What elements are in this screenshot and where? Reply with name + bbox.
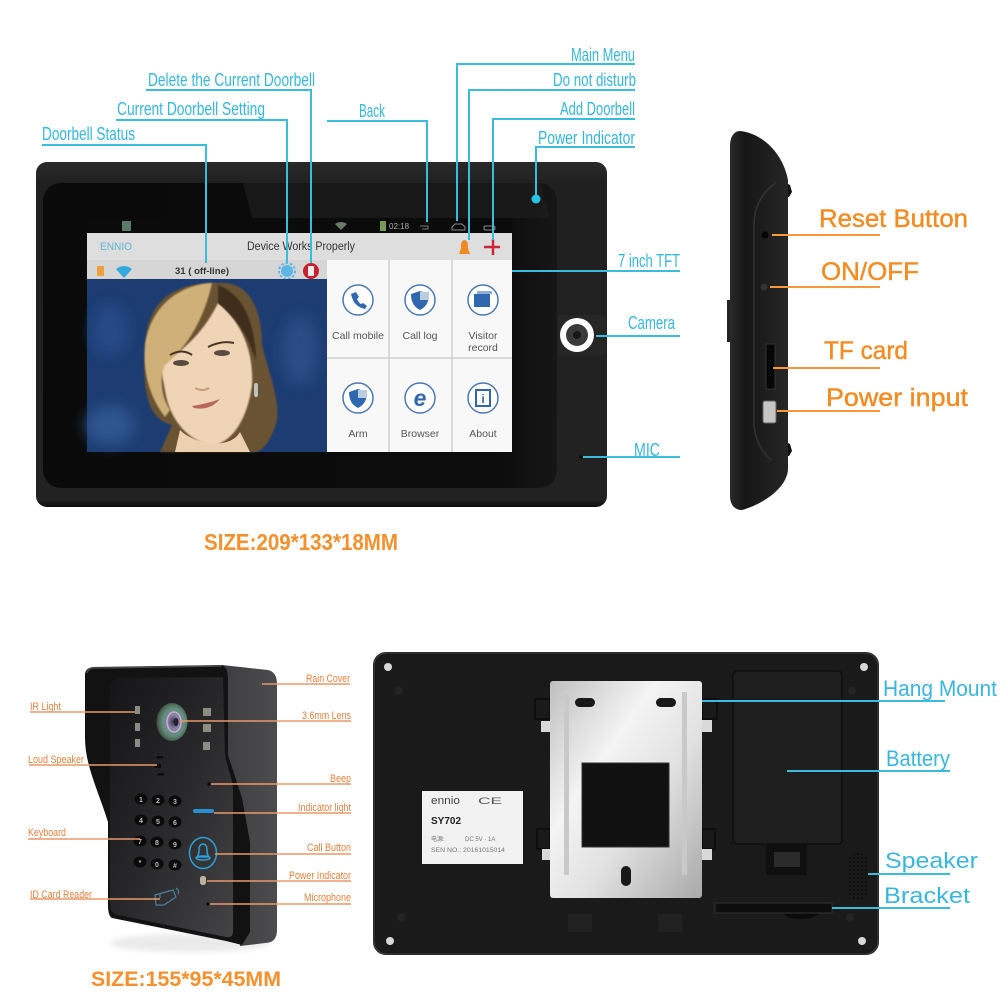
keypad digits: 4 [139,818,143,825]
speaker grille [848,853,868,900]
keypad digits: 3 [173,799,177,806]
icon: add plus [484,239,500,255]
app: call log: Call log [402,330,438,342]
doorbell status bar [87,260,327,279]
callout: power indicator [536,128,635,195]
power indicator light [532,194,540,204]
callout: 3.6mm lens: 3.6mm Lens [302,710,351,722]
app title bar: Device Works Properly [247,241,355,253]
callout: delete the current doorbell: Delete the Current Doorbell [148,70,315,90]
id card reader symbol [155,888,179,905]
app: arm: Arm [348,428,368,440]
call button [190,838,216,868]
product label: SY702 [431,816,461,827]
neck [175,430,250,452]
bracket latch [766,844,807,875]
callout: reset button: Reset Button [819,205,968,233]
callout: beep: Beep [330,773,351,785]
callout: add doorbell: Add Doorbell [560,99,635,119]
touchscreen display [86,218,512,452]
glass reflection [243,183,550,218]
callout: hang mount: Hang Mount [883,676,997,701]
icon: settings gear [279,263,295,279]
product label [422,791,523,864]
callout: tf card [773,337,908,368]
callout: loud speaker: Loud Speaker [28,754,84,766]
mic hole [580,456,582,458]
product label: DC 5V · 1A [465,837,495,843]
callout: microphone: Microphone [304,892,351,904]
callout: loud speaker [28,754,157,766]
earring [254,383,258,397]
app: about: i [481,392,485,406]
callout: current doorbell setting [116,99,287,263]
callout: ir light: IR Light [30,701,61,713]
keypad digits: 2 [156,798,160,805]
callout: ir light [30,701,135,713]
tf card slot [766,344,775,389]
power input port [763,401,776,423]
power switch [760,284,768,290]
callout: current doorbell setting: Current Doorbell Setting [117,99,265,119]
app menu grid [327,260,512,452]
nose and mouth [195,388,209,390]
microphone hole [206,902,210,906]
callout: 7 inch tft: 7 inch TFT [618,251,680,271]
callout: battery: Battery [886,746,950,771]
front camera [558,315,606,355]
rain cover hood [85,665,250,945]
product label: 电源: [431,835,445,843]
product label: CE [478,796,502,806]
keypad digits: 1 [139,797,143,804]
callout: power indicator: Power Indicator [538,128,635,148]
keypad digits: # [173,863,177,870]
hood rim highlight [87,666,222,673]
android status bar [87,218,512,233]
keypad [134,794,182,870]
callout: on/off: ON/OFF [821,258,919,286]
callout: do not disturb [469,70,636,240]
callout: beep [211,773,351,785]
doorbell outdoor unit [85,665,277,952]
keypad digits: 9 [173,842,177,849]
callout: power indicator: Power Indicator [289,870,351,882]
callout: power input: Power input [826,384,968,412]
callout: id card reader: ID Card Reader [30,889,92,901]
callout: tf card: TF card [824,337,908,365]
blonde bangs [145,283,212,417]
callout: camera: Camera [628,313,676,333]
app title bar: ENNIO [100,241,132,253]
front monitor unit [36,162,607,507]
app: visitor record: Visitor [469,330,498,342]
callout: bracket: Bracket [884,883,970,908]
app: browser [401,383,440,440]
callout: mic: MIC [634,440,660,460]
beep hole [207,782,211,786]
blue indicator light [193,809,214,813]
loud speaker slots [155,756,164,776]
mount window [582,763,669,847]
callout: mic [583,440,680,460]
side view of monitor [727,131,792,510]
ir lights [135,706,211,750]
callout: speaker: Speaker [885,848,978,873]
callout: doorbell status [42,124,206,263]
product label: ennio [431,795,460,807]
bottom recesses [568,914,682,932]
callout: main menu [457,45,635,221]
power indicator window [200,876,206,885]
app: browser: e [414,385,427,411]
face plate [110,677,233,937]
metal hang mount [550,681,702,898]
callout: call button [215,842,351,854]
inner display bezel [43,183,557,488]
android status bar: 02:18 [389,222,410,231]
callout: indicator light: Indicator light [298,802,351,814]
app: browser: Browser [401,428,440,440]
callout: main menu: Main Menu [571,45,635,65]
callout: indicator light [214,802,351,814]
app title bar [87,233,512,260]
callout: back: Back [359,101,386,121]
reset hole [762,232,768,238]
callout: rain cover: Rain Cover [306,673,350,685]
monitor back panel [373,652,879,955]
callout: id card reader [30,889,160,901]
camera lens [156,703,188,741]
callout: keyboard [28,827,140,839]
app: about [468,383,498,440]
app: call mobile: Call mobile [332,330,384,342]
callout: bracket [832,883,970,908]
callout: back [327,101,427,222]
bracket mount points [535,699,717,849]
battery cover [733,671,842,844]
callout: keyboard: Keyboard [28,827,66,839]
doorbell size label: SIZE:155*95*45MM [91,968,281,991]
hair back [144,283,277,452]
callout: do not disturb: Do not disturb [553,70,636,90]
app: call log [402,285,438,342]
callout: add doorbell [493,99,635,240]
product label: SEN NO.: 20161015014 [431,848,506,854]
corner screws [384,663,868,945]
app: about: About [469,428,497,440]
recessed screws [395,687,856,921]
keypad digits: 7 [138,839,142,846]
callout: call button: Call Button [307,842,351,854]
eyes and brows [170,342,234,355]
face [160,303,252,445]
app: call mobile [332,285,384,342]
icon: orange bell [459,240,470,254]
app: arm [343,383,373,440]
fold-out bracket [715,903,832,919]
doorbell status bar: 31 ( off-line) [175,266,229,277]
front size label: SIZE:209*133*18MM [204,529,398,555]
app: visitor record: record [468,342,498,354]
keypad digits: 0 [155,862,159,869]
icon: delete [303,263,319,279]
keypad digits: 8 [155,840,159,847]
callout: delete the current doorbell [146,70,315,263]
doorbell video feed [86,279,327,452]
app: visitor record [468,285,498,354]
keypad digits: * [139,860,142,867]
callout: doorbell status: Doorbell Status [42,124,135,144]
dark hair side [218,285,256,360]
rain cover side [222,665,277,946]
mount slots [575,698,676,886]
keypad digits [138,797,177,870]
callout: rain cover [262,673,350,685]
keypad digits: 6 [173,820,177,827]
callout: camera [596,313,680,336]
keypad digits: 5 [156,819,160,826]
